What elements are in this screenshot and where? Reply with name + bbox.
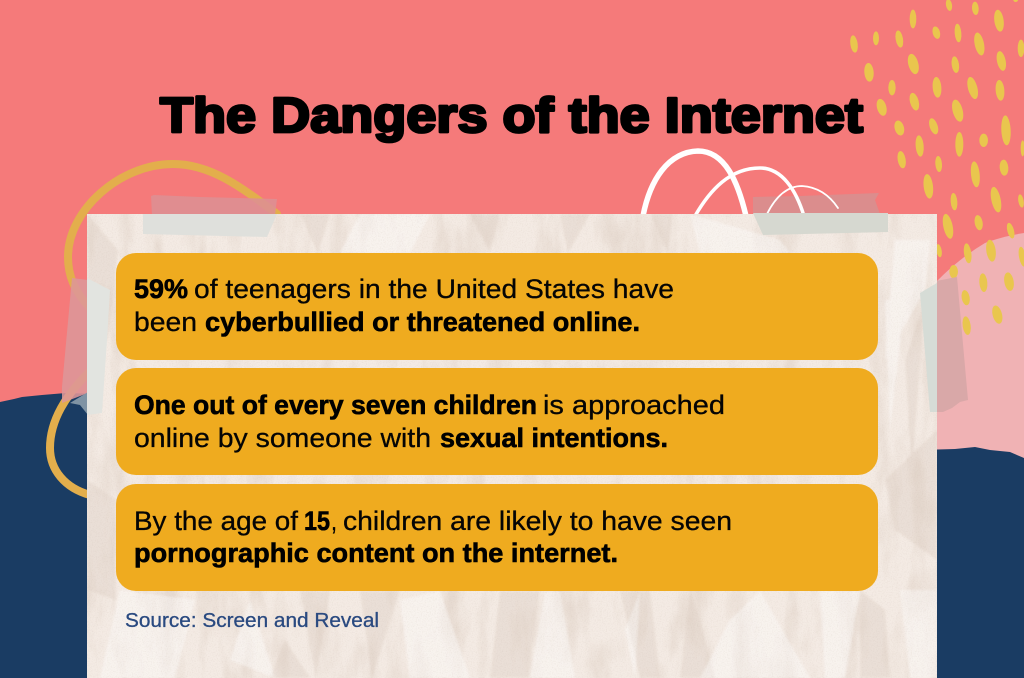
card: online approaches statistic: One out of every seven children	[134, 390, 537, 420]
card: online approaches statistic: is approached	[543, 390, 725, 420]
card: pornographic content statistic: By the age of	[134, 506, 299, 536]
card: cyberbullying statistic: been	[134, 307, 197, 337]
pink blob: right	[937, 233, 1024, 470]
card: cyberbullying statistic: 59%	[134, 274, 188, 304]
card: online approaches statistic	[116, 368, 878, 475]
card: cyberbullying statistic: cyberbullied or threatened online.	[205, 307, 640, 337]
card: online approaches statistic: online by someone with	[134, 423, 431, 453]
decorative yellow loop	[50, 164, 277, 495]
yellow dots pattern	[849, 0, 1024, 335]
navy torn shape: left	[0, 393, 100, 678]
card: cyberbullying statistic: of teenagers in the United States have	[194, 274, 674, 304]
tape: grey parts on paper	[87, 213, 937, 415]
card: pornographic content statistic	[116, 484, 878, 591]
card: cyberbullying statistic	[116, 253, 878, 360]
tape: pink parts behind paper	[62, 193, 968, 415]
title: The Dangers of the Internet	[160, 89, 863, 143]
card: pornographic content statistic: children are likely to have seen	[343, 506, 732, 536]
card: pornographic content statistic: pornographic content on the internet.	[134, 538, 618, 568]
card: pornographic content statistic: ,	[331, 506, 337, 536]
card: pornographic content statistic: 15	[304, 506, 330, 536]
source note: Source: Screen and Reveal	[125, 610, 379, 632]
navy torn shape: right	[920, 447, 1024, 678]
panel: crumpled paper	[87, 214, 937, 678]
card: online approaches statistic: sexual intentions.	[440, 423, 668, 453]
decorative white scribble loops	[643, 151, 838, 216]
